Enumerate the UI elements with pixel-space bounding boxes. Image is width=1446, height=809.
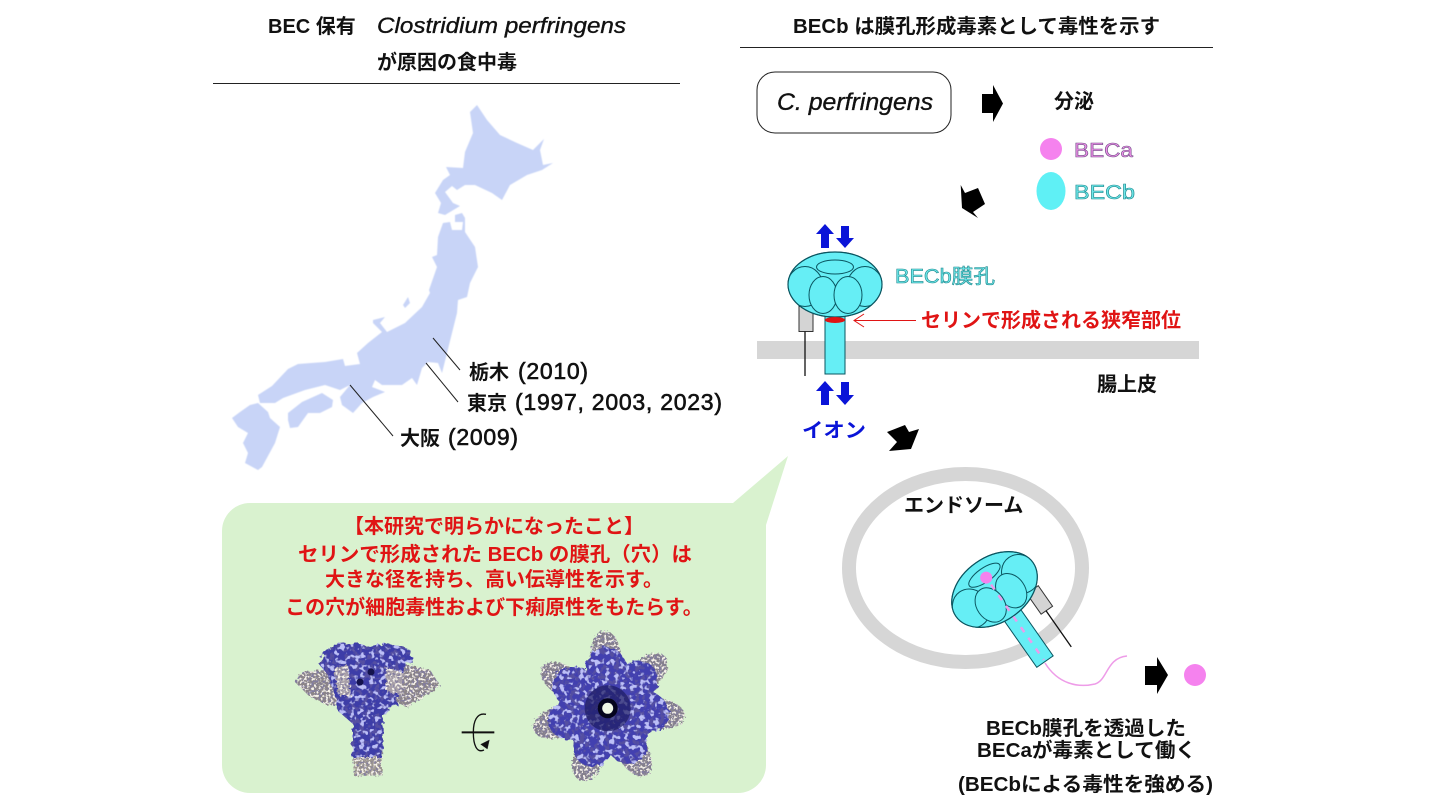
BECa toxin caption [958,717,1213,796]
map labels: Tochigi, Tokyo, Osaka outbreaks: 東京 [467,392,507,415]
C. perfringens label box: C. perfringens [777,89,933,116]
heading: left title [213,13,680,84]
callout: research findings [222,456,788,793]
endosome label: エンドソーム [904,495,1023,517]
membrane band [757,341,1199,359]
map labels: Tochigi, Tokyo, Osaka outbreaks: (1997, 2003, 2023) [515,389,722,415]
arrow: BECa release [1145,657,1168,694]
BECa toxin caption: BECb膜孔を透過した [986,717,1186,740]
heading: left title: が原因の食中毒 [377,50,517,74]
arrow: to endosome [887,425,919,451]
map labels: Tochigi, Tokyo, Osaka outbreaks [350,338,722,450]
findings text: セリンで形成された BECb の膜孔（穴）は [298,542,692,566]
infographic canvas [213,16,1213,795]
legend: BECa and BECb: BECa [1074,140,1134,162]
arrow: serine constriction pointer [854,314,916,327]
findings text: この穴が細胞毒性および下痢原性をもたらす。 [285,595,703,619]
secretion label: 分泌 [1054,90,1094,113]
endosome ring [849,474,1082,662]
legend: BECa and BECb [1036,138,1135,210]
protein structure: top view [529,631,686,786]
ion flow arrows: bottom [816,381,854,405]
arrow: secretion [982,85,1003,122]
BECa toxin caption: BECaが毒素として働く [977,738,1196,762]
map of Japan [232,105,553,470]
ion flow arrows: top [816,224,854,248]
map labels: Tochigi, Tokyo, Osaka outbreaks: 大阪 [400,427,440,450]
BECa exit strand [1045,656,1127,685]
legend: BECa and BECb: BECb [1074,182,1135,204]
map labels: Tochigi, Tokyo, Osaka outbreaks: (2010) [518,358,588,384]
findings text: 【本研究で明らかになったこと】 [344,515,644,538]
findings text [285,515,703,619]
BECb pore on membrane [787,252,883,376]
heading: right title: BECb は膜孔形成毒素として毒性を示す [793,14,1160,38]
released BECa [1184,664,1206,686]
map labels: Tochigi, Tokyo, Osaka outbreaks: (2009) [448,424,518,450]
C. perfringens label box [757,72,951,133]
serine constriction label: セリンで形成される狭窄部位 [921,308,1181,332]
BECb pore in endosome [951,551,1072,668]
rotation symbol [462,714,494,751]
findings text: 大きな径を持ち、高い伝導性を示す。 [325,567,663,591]
arrow: to membrane [961,185,985,218]
heading: left title: Clostridium perfringens [377,13,626,38]
map labels: Tochigi, Tokyo, Osaka outbreaks: 栃木 [469,361,509,384]
intestinal epithelium label: 腸上皮 [1097,373,1157,396]
heading: left title: BEC 保有 [268,15,356,38]
BECb pore label: BECb膜孔 [895,265,995,288]
protein structure: side view [295,643,440,776]
BECa toxin caption: (BECbによる毒性を強める) [958,773,1213,796]
ion label: イオン [802,420,866,442]
